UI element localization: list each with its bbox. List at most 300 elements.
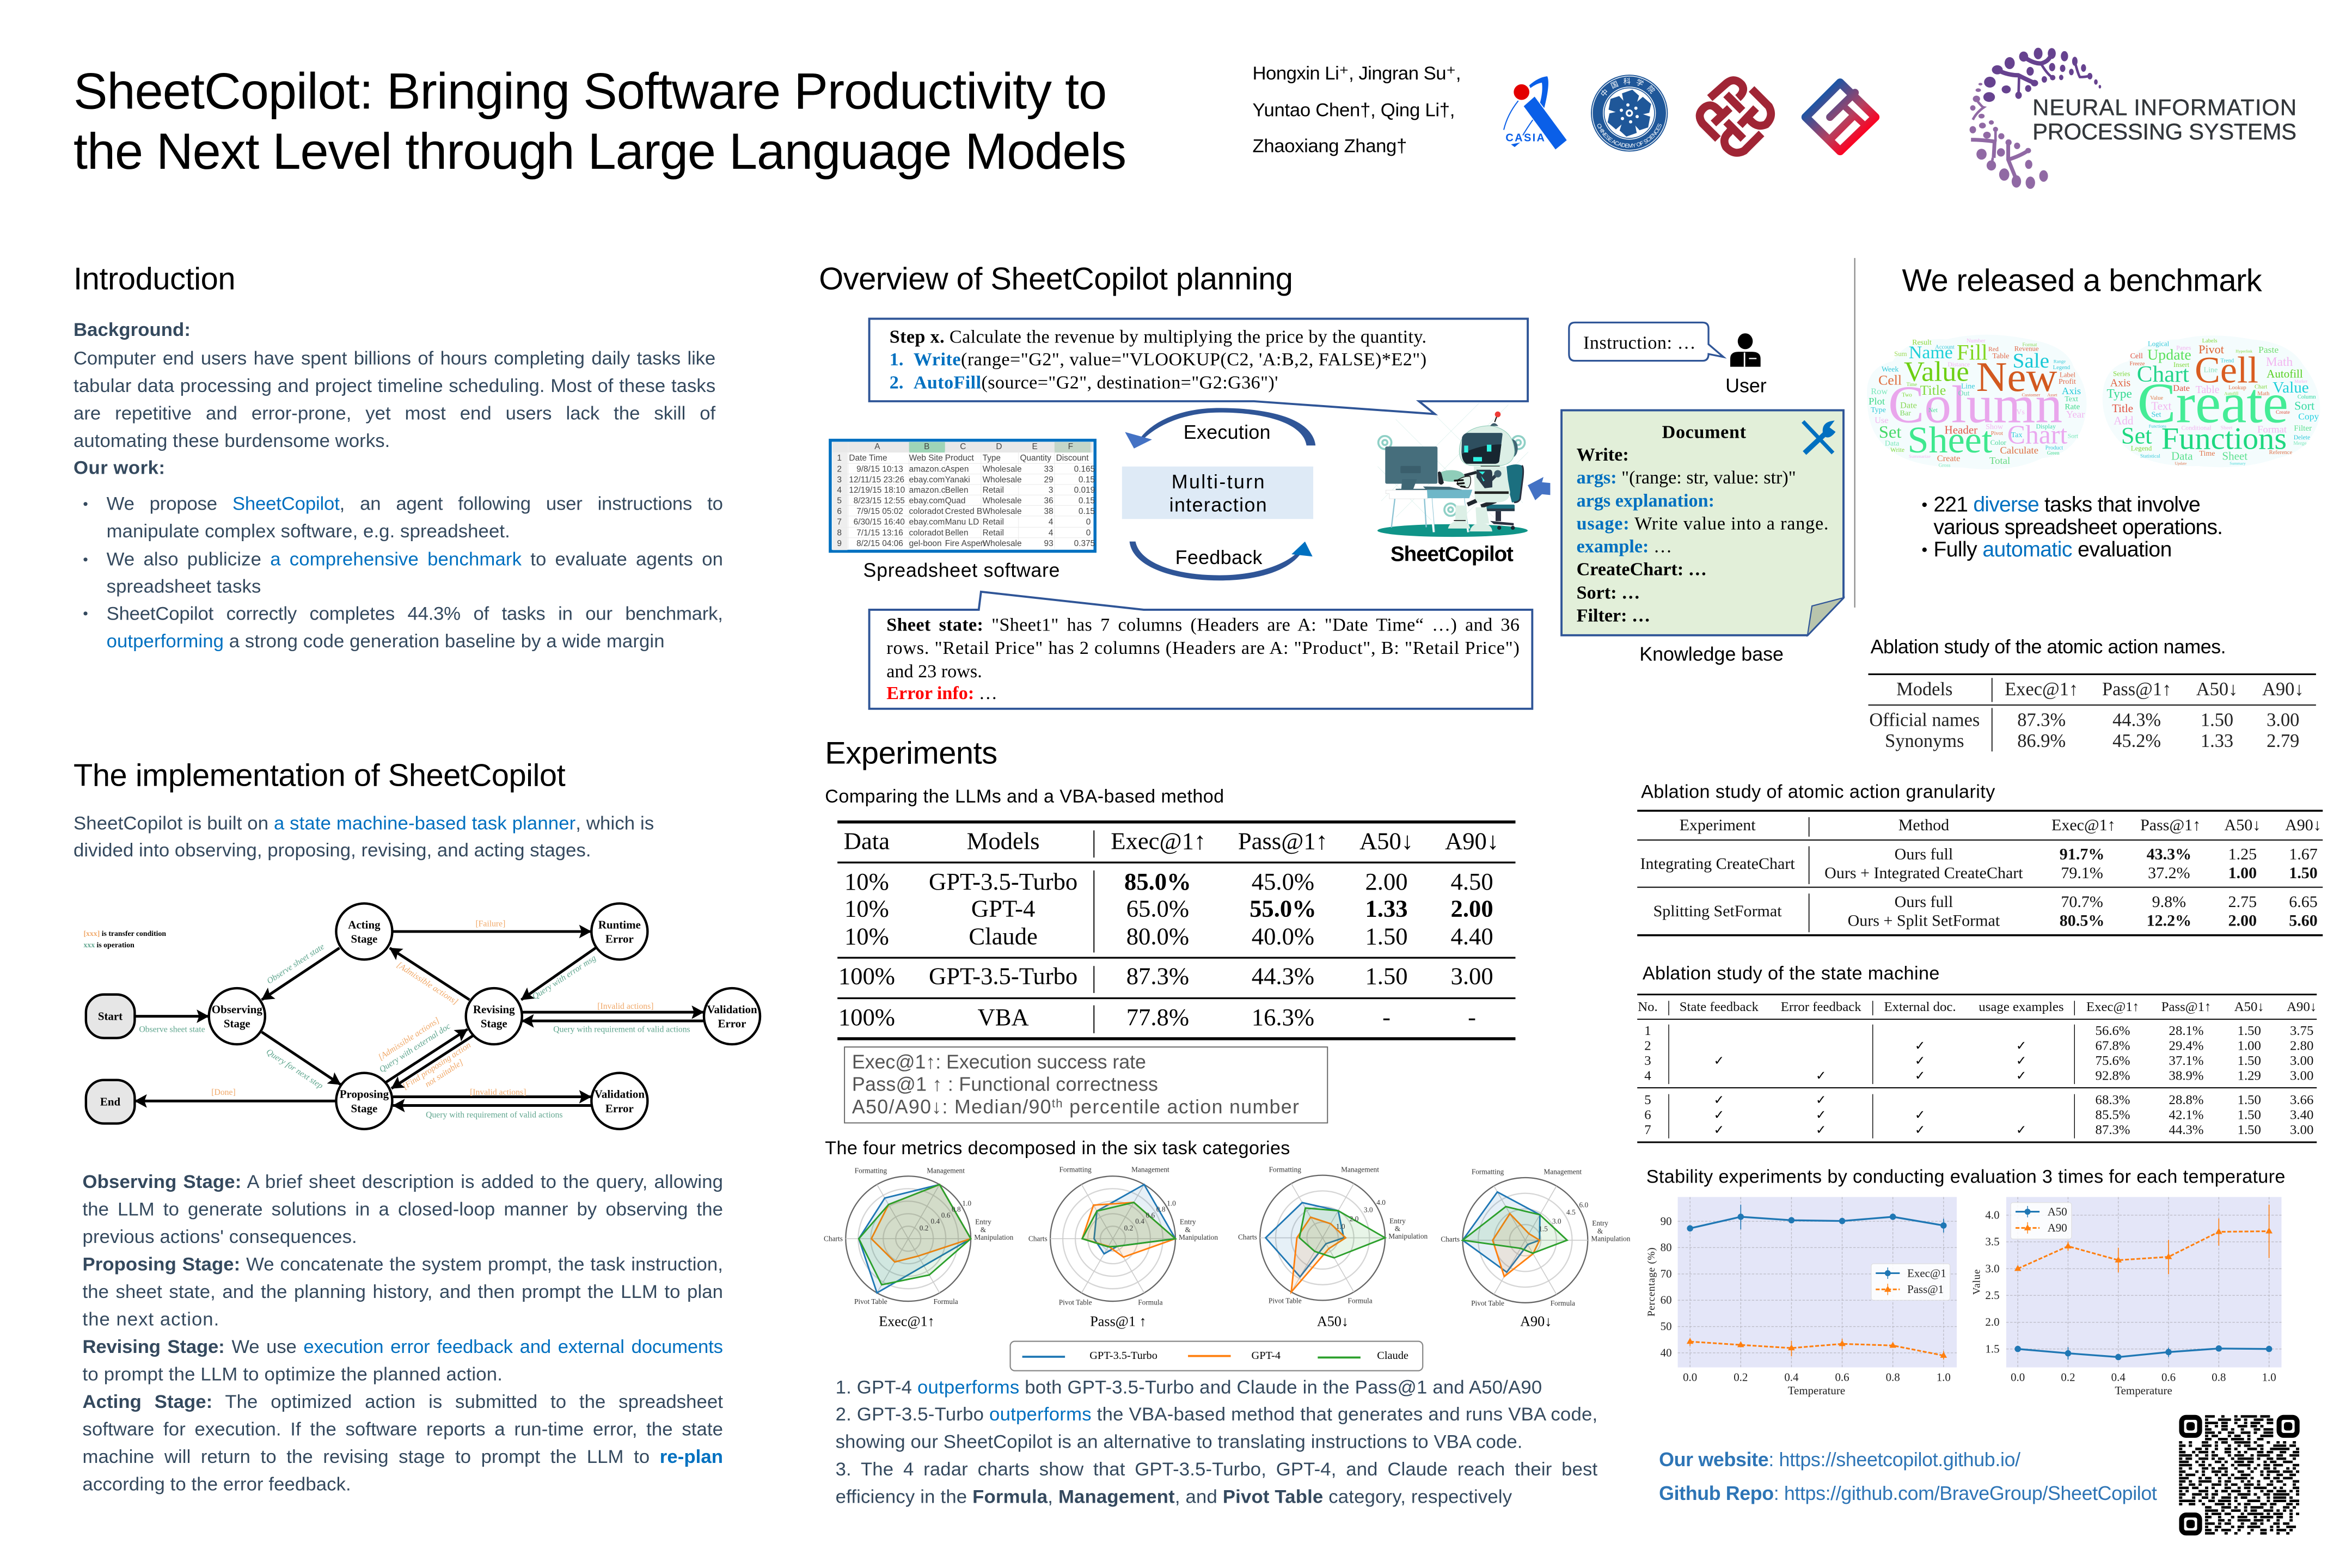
line chart: exec and pass: Temperature: [1788, 1384, 1845, 1397]
radar chart: A50: 2.0: [1350, 1215, 1359, 1223]
word cloud: right: Labels: [2202, 338, 2218, 344]
callout: step box: AutoFill(source="G2", destination="G2:G36")': [914, 373, 1278, 393]
spreadsheet: Date Time: [849, 454, 887, 463]
node labels: Runtime: [598, 918, 641, 931]
table: action names: 44.3%: [2112, 709, 2161, 730]
document panel: args: "(range: str, value: str)": [1577, 468, 1796, 488]
radar chart: Exec@1: [824, 1166, 1014, 1306]
table: state machine: Error feedback: [1781, 1000, 1861, 1014]
word cloud: left: Format: [2023, 342, 2037, 348]
icon: Chinese Academy of Sciences seal: [1591, 75, 1668, 151]
spreadsheet: 33: [1044, 464, 1054, 474]
spreadsheet: amazon.c: [909, 464, 946, 474]
table: granularity: 1.50: [2289, 864, 2318, 882]
document panel: args explanation:: [1577, 491, 1714, 511]
node labels: Validation: [595, 1088, 645, 1101]
word cloud: left: Create: [1937, 454, 1960, 463]
QR code: [2179, 1417, 2299, 1533]
word cloud: left: Revenue: [2014, 345, 2039, 353]
line chart: A50 and A90: A50: [2048, 1205, 2067, 1218]
word cloud: right: [2103, 335, 2320, 467]
table: state machine: ✓: [1915, 1038, 1925, 1054]
radar chart: A50: Management: [1341, 1165, 1379, 1173]
table: comparison: A50↓: [1359, 827, 1413, 854]
authors: Hongxin Li⁺, Jingran Su⁺,: [1253, 63, 1461, 84]
table: comparison: Claude: [969, 922, 1038, 950]
radar chart: A50: 3.0: [1364, 1206, 1373, 1214]
heading: benchmark: We released a benchmark: [1902, 263, 2262, 298]
word cloud: left: Sort: [2068, 433, 2079, 440]
node labels: Error: [605, 933, 634, 946]
radar chart: Exec@1: Charts: [824, 1234, 843, 1242]
word cloud: left: Title: [1920, 382, 1946, 398]
word cloud: left: Fill: [1957, 340, 1988, 365]
table: action names: 45.2%: [2112, 731, 2161, 751]
word cloud: right: Series: [2113, 370, 2130, 378]
box: multi-turn interaction: [1122, 467, 1313, 519]
word cloud: right: Logical: [2148, 340, 2170, 347]
word cloud: right: Paste: [2258, 345, 2278, 355]
radar chart: Exec@1: 0.6: [941, 1211, 951, 1220]
radar chart: A50: Entry: [1389, 1217, 1406, 1225]
radar chart: Pass@1: Formula: [1138, 1298, 1163, 1306]
table: comparison: 1.50: [1365, 922, 1408, 950]
icon: NeurIPS logo: NEURAL INFORMATION: [2032, 95, 2296, 120]
spreadsheet: 8/2/15 04:06: [856, 539, 903, 548]
table: granularity: Method: [1898, 816, 1949, 834]
table: state machine: 3.40: [2290, 1107, 2313, 1122]
word cloud: left: Write: [1890, 446, 1904, 454]
table: granularity: 6.65: [2289, 893, 2318, 911]
text block: background: Background:: [74, 320, 191, 340]
heading: experiments: Experiments: [825, 736, 997, 770]
radar chart: A90: Pivot Table: [1471, 1299, 1504, 1307]
table: granularity: 2.00: [2228, 911, 2257, 929]
label: feedback: Feedback: [1175, 547, 1263, 568]
word cloud: right: Type: [2107, 387, 2132, 401]
word cloud: left: Pivot: [1991, 431, 2003, 437]
word cloud: left: Value: [1904, 357, 1969, 388]
word cloud: right: Conditional: [2181, 424, 2212, 431]
text block: background: automating these burdensome works.: [74, 431, 390, 451]
word cloud: left: Total: [1989, 455, 2010, 467]
line chart: exec and pass: 0.4: [1784, 1370, 1799, 1383]
line chart: exec and pass: Exec@1: [1907, 1266, 1946, 1279]
word cloud: left: Set: [1879, 422, 1901, 442]
table: action names: 1.33: [2201, 731, 2233, 751]
table: action names: Exec@1↑: [2005, 679, 2078, 700]
word cloud: left: Line: [1961, 383, 1975, 390]
table: state machine: ✓: [1714, 1107, 1724, 1122]
table: granularity: Integrating CreateChart: [1640, 855, 1795, 873]
radar chart: Exec@1: 0.4: [930, 1217, 940, 1226]
spreadsheet: 5: [837, 496, 842, 505]
table: granularity: Experiment: [1680, 816, 1756, 834]
text block: stage descriptions: the sheet state, and the planning history, and then prompt the LLM to plan: [83, 1282, 723, 1302]
table: state machine: No.: [1638, 1000, 1658, 1014]
panel: experiments: [824, 736, 1631, 1508]
spreadsheet: F: [1068, 442, 1073, 451]
table: granularity: Ours full: [1895, 846, 1953, 863]
spreadsheet: 0.15: [1079, 496, 1095, 505]
radar chart: Pass@1: Manipulation: [1179, 1233, 1218, 1241]
word cloud: right: Format: [2257, 424, 2287, 435]
table: state machine: 75.6%: [2096, 1054, 2130, 1068]
line chart: A50 and A90: 4.0: [1985, 1209, 2000, 1222]
text block: stage descriptions: [83, 1172, 723, 1494]
text block: our work bullets: We also publicize a comprehensive benchmark to evaluate agents on: [107, 549, 723, 570]
radar chart: Pass@1: 0.2: [1124, 1224, 1133, 1232]
word cloud: right: Update: [2147, 347, 2191, 364]
line chart: A50 and A90: Value: [1971, 1269, 1983, 1295]
table: granularity: [1637, 811, 2323, 935]
table: state machine: 2: [1644, 1039, 1651, 1054]
table: state machine: usage examples: [1979, 1000, 2064, 1014]
spreadsheet: Aspen: [945, 464, 969, 474]
spreadsheet: Bellen: [945, 529, 969, 538]
spreadsheet: ebay.com: [909, 475, 945, 485]
word cloud: left: Header: [1945, 424, 1977, 437]
line chart: A50 and A90: 0.8: [2212, 1370, 2226, 1383]
radar chart: Exec@1: Formula: [933, 1297, 958, 1306]
table: action names: Models: [1896, 679, 1952, 700]
authors: [1253, 63, 1461, 157]
word cloud: left: Use: [1875, 415, 1889, 425]
table: comparison: 100%: [838, 962, 895, 989]
icon: NeurIPS logo: PROCESSING SYSTEMS: [2032, 119, 2296, 144]
heading: overview: Overview of SheetCopilot planning: [819, 262, 1293, 297]
document panel: Document: [1662, 422, 1747, 442]
spreadsheet: 2: [837, 464, 842, 474]
panel: implementation: [74, 758, 760, 1494]
links: [1659, 1449, 2157, 1504]
word cloud: left: Date: [1900, 401, 1917, 411]
word cloud: left: Time: [1907, 382, 1917, 388]
callout: instruction: Instruction: …: [1583, 333, 1696, 353]
table: granularity: 5.60: [2289, 911, 2318, 929]
document panel: Write:: [1577, 445, 1629, 465]
spreadsheet: 7/9/15 05:02: [856, 507, 903, 516]
table: state machine: 87.3%: [2096, 1123, 2130, 1137]
table: state machine: 3.00: [2290, 1069, 2313, 1083]
table: action names: Synonyms: [1885, 731, 1964, 751]
word cloud: right: Cell: [2130, 352, 2143, 360]
table: granularity: 1.25: [2228, 846, 2257, 863]
word cloud: left: Year: [2066, 409, 2085, 420]
text block: benchmark bullets: [1922, 493, 2223, 561]
word cloud: left: Type: [1871, 406, 1886, 414]
radar chart: A50: Charts: [1238, 1233, 1257, 1241]
text block: our work bullets: outperforming a strong code generation baseline by a wide margin: [107, 631, 665, 652]
radar chart: Exec@1: Manipulation: [974, 1233, 1014, 1241]
line chart: exec and pass: 50: [1661, 1320, 1672, 1333]
legend box: metrics: Exec@1↑: Execution success rate: [852, 1051, 1146, 1073]
table: comparison: 2.00: [1451, 895, 1493, 922]
document panel: usage: Write value into a range.: [1577, 514, 1828, 534]
table: comparison: [837, 822, 1515, 1039]
word cloud: right: Autofill: [2224, 391, 2239, 396]
table: state machine: ✓: [1714, 1122, 1724, 1137]
radar captions: A90↓: [1520, 1314, 1552, 1330]
text block: implementation intro: [74, 813, 654, 861]
table: state machine: ✓: [2016, 1053, 2026, 1068]
line chart: exec and pass: 0.0: [1683, 1370, 1697, 1383]
line chart: exec and pass: 90: [1661, 1215, 1672, 1228]
text block: benchmark bullets: 221 diverse tasks that involve: [1933, 493, 2201, 516]
word cloud: left: Plot: [1869, 396, 1885, 407]
word cloud: left: Chart: [2007, 420, 2067, 449]
node labels: Error: [718, 1017, 746, 1030]
table: comparison: -: [1468, 1003, 1476, 1031]
word cloud: left: Red: [1988, 346, 1999, 353]
word cloud: left: Summarize: [1909, 454, 1931, 459]
word cloud: left: Color: [1990, 439, 2007, 446]
word cloud: right: Set: [2152, 411, 2161, 419]
table: state machine: ✓: [1714, 1053, 1724, 1068]
spreadsheet: 9/8/15 10:13: [856, 464, 903, 474]
table: state machine: ✓: [1816, 1092, 1827, 1107]
table: state machine: ✓: [2016, 1038, 2026, 1054]
table: comparison: 40.0%: [1252, 922, 1314, 950]
radar chart: A50: 1.0: [1336, 1222, 1345, 1230]
radar chart: A50: Manipulation: [1388, 1232, 1428, 1240]
table: state machine: 1.50: [2238, 1123, 2261, 1137]
table: comparison: 65.0%: [1126, 895, 1189, 922]
radar chart: Exec@1: &: [981, 1226, 987, 1234]
text block: stage descriptions: Proposing Stage: We concatenate the system prompt, the task instruction,: [83, 1254, 723, 1275]
document panel: example: …: [1577, 537, 1672, 557]
text block: stage descriptions: Observing Stage: A brief sheet description is added to the query, allowing: [83, 1172, 723, 1192]
table: action names: 1.50: [2201, 709, 2233, 730]
text block: benchmark bullets: various spreadsheet operations.: [1933, 516, 2223, 539]
word cloud: left: Distance: [1947, 361, 1970, 368]
radar chart: A50: &: [1395, 1224, 1401, 1233]
table: state machine: 2.80: [2290, 1039, 2313, 1054]
table: granularity: Splitting SetFormat: [1653, 902, 1782, 920]
spreadsheet: Wholesale: [983, 539, 1022, 548]
radar chart: A50: [1238, 1165, 1428, 1304]
word cloud: left: Two: [1902, 393, 1912, 398]
word cloud: right: Reference: [2269, 450, 2293, 456]
table: comparison: VBA: [978, 1003, 1029, 1031]
word cloud: left: Row: [1871, 387, 1888, 396]
line chart: A50 and A90: 0.0: [2011, 1370, 2025, 1383]
line chart: A50 and A90: 0.6: [2161, 1370, 2176, 1383]
legend box: metrics: th: [1052, 1097, 1063, 1110]
table: granularity: 70.7%: [2061, 893, 2103, 911]
table: state machine: 68.3%: [2096, 1093, 2130, 1107]
table: granularity: Pass@1↑: [2140, 816, 2201, 834]
word cloud: right: Lookup: [2228, 385, 2246, 391]
text block: stage descriptions: Revising Stage: We use execution error feedback and external documents: [83, 1337, 723, 1357]
label: knowledge base: Knowledge base: [1639, 644, 1784, 665]
word cloud: right: Sheet: [2222, 450, 2247, 462]
legend box: metrics: Pass@1 ↑ : Functional correctness: [852, 1074, 1158, 1095]
radar chart: Exec@1: Pivot Table: [854, 1297, 887, 1306]
spreadsheet: coloradot: [909, 529, 944, 538]
spreadsheet: A: [874, 442, 880, 451]
table: comparison: 1.33: [1365, 895, 1408, 922]
heading: granularity: Ablation study of atomic action granularity: [1641, 782, 1995, 803]
radar chart: Pass@1: 1.0: [1167, 1199, 1176, 1208]
word cloud: right: Filter: [2294, 424, 2312, 433]
callout: sheet state: Error info: …: [886, 683, 997, 703]
table: state machine: 42.1%: [2169, 1107, 2204, 1122]
nodes: [86, 903, 760, 1129]
text block: findings: 2. GPT-3.5-Turbo outperforms the VBA-based method that generates and runs VBA code,: [836, 1404, 1597, 1425]
legend: state machine: xxx is operation: [83, 941, 134, 949]
word cloud: left: Rate: [2065, 402, 2080, 411]
word cloud: right: Autofill: [2267, 367, 2303, 380]
radar chart: Exec@1: Entry: [975, 1217, 991, 1226]
table: comparison: 4.40: [1451, 922, 1493, 950]
word cloud: right: Freeze: [2129, 361, 2145, 367]
table: action names: A90↓: [2262, 679, 2304, 700]
radar chart: Pass@1: Management: [1131, 1166, 1169, 1174]
table: state machine: 3.75: [2290, 1024, 2313, 1038]
word cloud: left: Green: [2047, 451, 2060, 456]
table: state machine: 28.8%: [2169, 1093, 2204, 1107]
node labels: Acting: [348, 918, 381, 931]
word cloud: right: Axis: [2110, 377, 2130, 389]
radar captions: A50↓: [1317, 1314, 1349, 1330]
word cloud: left: Number: [1967, 338, 1986, 344]
spreadsheet: 4: [837, 486, 842, 495]
radar chart: Exec@1: Management: [927, 1166, 965, 1174]
word cloud: left: [1867, 335, 2087, 469]
spreadsheet: coloradot: [909, 507, 944, 516]
edge labels: [Admissible actions]: [395, 960, 460, 1007]
table: state machine: 1.00: [2238, 1039, 2261, 1054]
table: granularity: 1.00: [2228, 864, 2257, 882]
text block: benchmark bullets: Fully automatic evaluation: [1933, 538, 2172, 561]
line chart: exec and pass: 80: [1661, 1241, 1672, 1254]
spreadsheet: 93: [1044, 539, 1054, 548]
node labels: Stage: [224, 1017, 250, 1030]
word cloud: right: Line: [2204, 366, 2218, 375]
word cloud: right: Sort: [2294, 399, 2314, 412]
icon: PolyU logo: [1700, 81, 1771, 153]
spreadsheet: 3: [1049, 486, 1053, 495]
line chart: A50 and A90: [1971, 1197, 2282, 1397]
radar chart: A90: 1.5: [1539, 1224, 1548, 1233]
word cloud: left: New: [1976, 353, 2057, 400]
radar chart: A50: Pivot Table: [1269, 1296, 1302, 1304]
line chart: A50 and A90: A90: [2048, 1221, 2067, 1234]
spreadsheet: Quantity: [1020, 454, 1051, 463]
table: state machine: ✓: [1816, 1107, 1827, 1122]
authors: Zhaoxiang Zhang†: [1253, 136, 1407, 157]
subheading: comparison: Comparing the LLMs and a VBA-based method: [825, 786, 1224, 807]
word cloud: right: Hyperlink: [2235, 349, 2252, 354]
table: comparison: 87.3%: [1126, 962, 1189, 989]
radar chart: Pass@1: [1028, 1166, 1218, 1306]
spreadsheet: B: [924, 442, 929, 451]
table: comparison: 44.3%: [1252, 962, 1314, 989]
document panel: [1561, 411, 1843, 635]
spreadsheet: 1: [837, 454, 842, 463]
radar chart: A90: Management: [1543, 1168, 1582, 1176]
edge labels: Query with requirement of valid actions: [553, 1025, 690, 1034]
word cloud: right: Legend: [2131, 445, 2152, 452]
table: granularity: Exec@1↑: [2051, 816, 2116, 834]
text block: background: tabular data processing and project timeline scheduling. Most of these tasks: [74, 376, 715, 396]
spreadsheet: Bellen: [945, 486, 969, 495]
edge labels: [Admissible actions]: [377, 1016, 441, 1062]
radar chart: A90: 3.0: [1552, 1217, 1561, 1226]
word cloud: right: Title: [2112, 402, 2133, 415]
table: comparison: 10%: [844, 895, 889, 922]
spreadsheet: 0.15: [1079, 475, 1095, 485]
spreadsheet: 12/11/15 23:26: [849, 475, 904, 485]
links: Our website: https://sheetcopilot.github.io/: [1659, 1449, 2020, 1471]
table: state machine: 56.6%: [2096, 1024, 2130, 1038]
text block: stage descriptions: the next action.: [83, 1309, 219, 1330]
line chart: A50 and A90: 1.0: [2262, 1370, 2276, 1383]
table: state machine: ✓: [2016, 1068, 2026, 1083]
callout: sheet state: [869, 592, 1532, 709]
spreadsheet: 0.019: [1074, 486, 1095, 495]
word cloud: right: Sheet: [2221, 425, 2233, 431]
radar chart: A90: [1441, 1168, 1631, 1307]
word cloud: right: Insert: [2173, 361, 2190, 369]
word cloud: left: Product: [2045, 445, 2063, 451]
table: action names: 2.79: [2267, 731, 2299, 751]
table: state machine: ✓: [1915, 1053, 1925, 1068]
icon: SheetCopilot robot: [1377, 403, 1528, 537]
table: state machine: 85.5%: [2096, 1107, 2130, 1122]
legend: state machine: [83, 929, 166, 949]
radar chart: Pass@1: Charts: [1028, 1234, 1048, 1242]
text block: findings: showing our SheetCopilot is an alternative to translating instructions to VBA code.: [836, 1432, 1522, 1453]
spreadsheet: 7/1/15 13:16: [856, 529, 903, 538]
radar legend: GPT-4: [1252, 1350, 1281, 1362]
table: state machine: 6: [1644, 1107, 1651, 1122]
radar captions: [879, 1314, 1552, 1330]
word cloud: right: Add: [2114, 414, 2134, 427]
table: state machine: 3.00: [2290, 1054, 2313, 1068]
line chart: exec and pass: 60: [1661, 1294, 1672, 1307]
word cloud: left: Bar: [1900, 409, 1911, 418]
table: comparison: GPT-3.5-Turbo: [929, 868, 1077, 895]
table: comparison: A90↓: [1445, 827, 1499, 854]
table: comparison: 3.00: [1451, 962, 1493, 989]
table: comparison: -: [1382, 1003, 1391, 1031]
table: comparison: Pass@1↑: [1238, 827, 1328, 854]
line chart: exec and pass: Pass@1: [1907, 1283, 1944, 1296]
heading: state machine ablation: Ablation study of the state machine: [1643, 963, 1939, 984]
word cloud: right: Set: [2121, 422, 2152, 449]
text block: findings: efficiency in the Formula, Management, and Pivot Table category, respectively: [836, 1487, 1512, 1508]
word cloud: left: Cell: [1878, 372, 1902, 388]
word cloud: left: Table: [1992, 352, 2009, 360]
table: state machine: A90↓: [2287, 1000, 2317, 1014]
table: state machine: ✓: [1915, 1068, 1925, 1083]
table: comparison: Data: [844, 827, 890, 854]
radar chart: A90: Charts: [1441, 1235, 1460, 1244]
table: state machine: 1.50: [2238, 1093, 2261, 1107]
node labels: End: [100, 1095, 120, 1108]
table: state machine: 1.29: [2238, 1069, 2261, 1083]
table: state machine: 37.1%: [2169, 1054, 2204, 1068]
word cloud: left: Out: [1958, 390, 1970, 398]
table: state machine: 3.66: [2290, 1093, 2313, 1107]
text block: implementation intro: SheetCopilot is built on a state machine-based task planner, which is: [74, 813, 654, 834]
edge labels: Observe sheet state: [139, 1025, 205, 1034]
title: SheetCopilot: Bringing Software Productivity to: [74, 63, 1107, 120]
spreadsheet: Type: [983, 454, 1001, 463]
legend box: metrics: A50/A90↓: Median/90: [852, 1096, 1051, 1118]
